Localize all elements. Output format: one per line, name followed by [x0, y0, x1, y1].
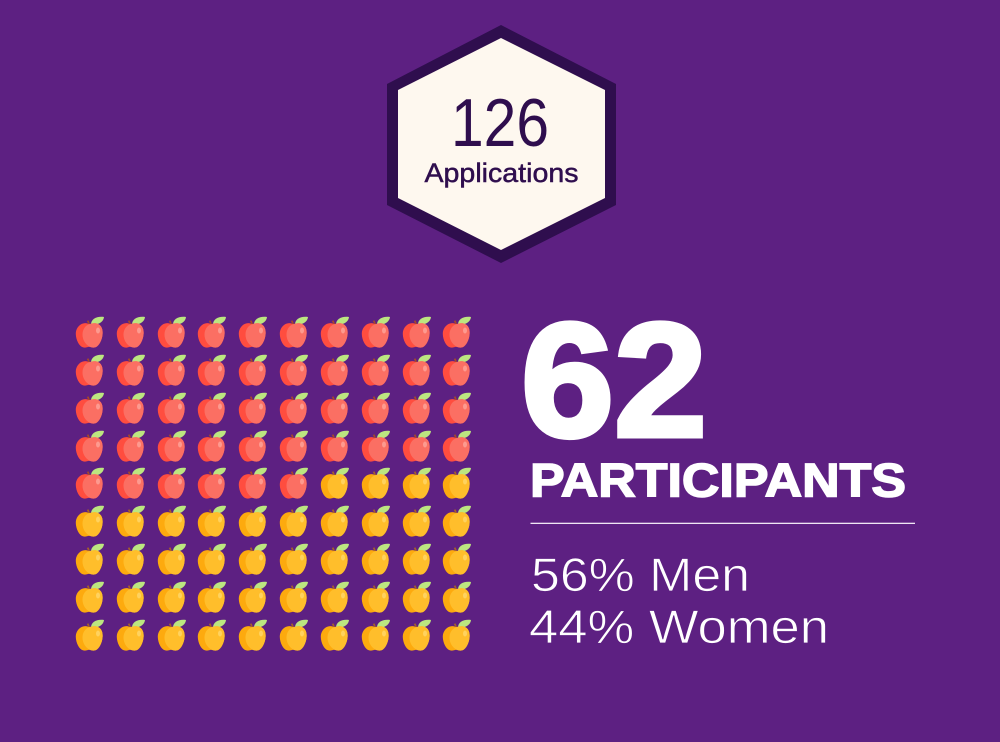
men share: 56% Men	[531, 548, 750, 601]
applications count: 126	[451, 85, 549, 161]
apple pictogram grid	[76, 317, 471, 651]
applications label: Applications	[424, 158, 578, 188]
participants count: 62	[521, 290, 707, 471]
divider line	[530, 523, 915, 524]
hexagon badge: applications	[387, 25, 616, 263]
participants label: PARTICIPANTS	[530, 454, 906, 506]
women share: 44% Women	[529, 600, 829, 653]
